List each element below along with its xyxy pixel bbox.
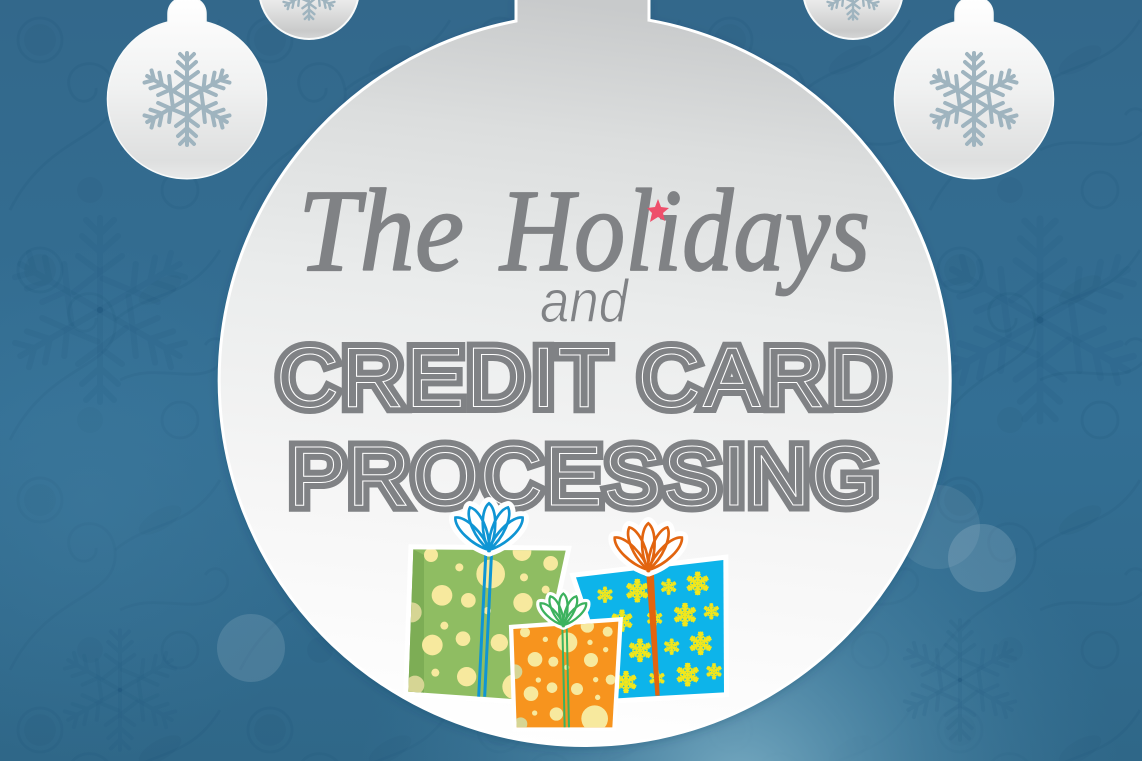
title: The Holidays: Holidays xyxy=(498,165,870,296)
bokeh light circles xyxy=(217,485,1016,682)
green ribbon and bow xyxy=(538,594,589,727)
title: Processing: PROCESSING xyxy=(288,430,879,524)
title: Credit Card: CREDIT CARD xyxy=(276,332,890,425)
large ornament right xyxy=(894,0,1053,179)
orange ribbon and bow xyxy=(610,523,686,696)
small ornament left xyxy=(259,0,359,39)
gift: blue with snowflakes xyxy=(576,523,724,698)
icon: pink star xyxy=(647,199,669,222)
blue ribbon and bow xyxy=(451,503,527,697)
small ornament right xyxy=(803,0,903,39)
main ornament xyxy=(219,0,950,745)
subtitle: and: and xyxy=(540,268,629,335)
title: The Holidays: The xyxy=(298,165,464,296)
gift: green with dots xyxy=(402,503,566,700)
title: Credit Card: CREDIT CARD xyxy=(276,332,890,425)
icon: snowflake xyxy=(928,53,1020,145)
main ornament shadow xyxy=(219,0,950,748)
title: Processing: PROCESSING xyxy=(288,430,879,524)
gifts illustration xyxy=(402,503,724,732)
gift: orange with dots xyxy=(508,594,618,732)
title: The Holidays xyxy=(298,165,870,296)
icon: snowflake xyxy=(141,53,233,145)
large ornament left xyxy=(107,0,266,179)
